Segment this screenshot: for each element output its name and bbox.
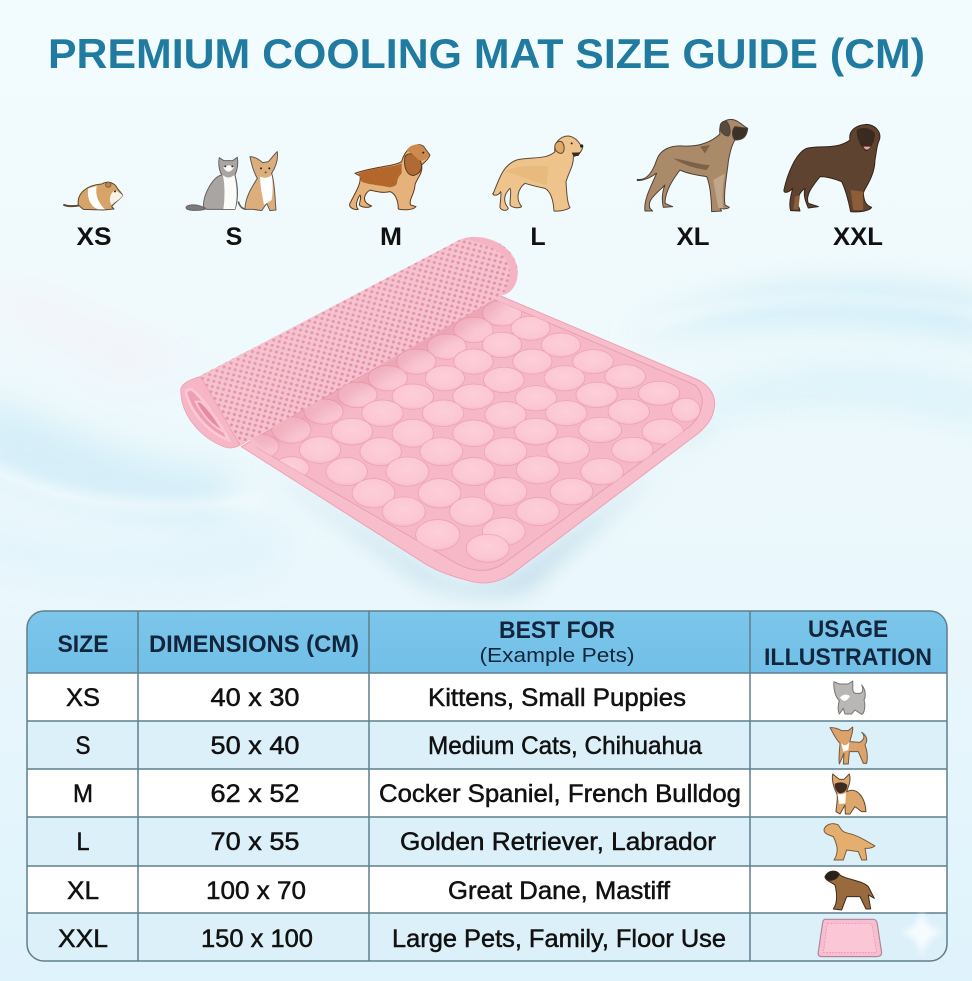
table header: (Example Pets) [480, 645, 634, 667]
table header: DIMENSIONS (CM) [149, 631, 359, 658]
size labels: M [380, 223, 402, 251]
size labels [76, 223, 883, 251]
row XL: 100 x 70 [206, 877, 306, 905]
size table [27, 611, 947, 961]
row XS [66, 684, 686, 712]
row XS: XS [66, 684, 100, 712]
icon: chihuahua small [830, 727, 867, 764]
table body and row stripes [28, 612, 946, 912]
row XXL [58, 925, 726, 953]
size labels: XL [676, 223, 710, 251]
icon: golden retriever [493, 136, 583, 211]
row S: Medium Cats, Chihuahua [428, 732, 702, 760]
icon: great dane [637, 119, 748, 212]
row M: Cocker Spaniel, French Bulldog [379, 780, 741, 808]
size labels: XS [76, 223, 112, 251]
size labels: L [530, 223, 546, 251]
row XL: XL [67, 877, 99, 905]
rolled mesh end [181, 237, 518, 448]
row XXL: Large Pets, Family, Floor Use [392, 925, 726, 953]
size labels: XXL [833, 223, 883, 251]
usage illustrations [818, 681, 882, 957]
table rows text [58, 684, 741, 953]
table header: ILLUSTRATION [764, 644, 932, 671]
icon: hamster [63, 182, 123, 210]
row L [76, 828, 716, 856]
size lineup: pets by size [63, 119, 883, 251]
row L: Golden Retriever, Labrador [400, 828, 716, 856]
row L: L [76, 828, 90, 856]
icon: golden retriever small [824, 824, 875, 860]
icon: chihuahua [238, 152, 278, 211]
row XS: Kittens, Small Puppies [428, 684, 686, 712]
flat mat with embossed circles [240, 295, 715, 583]
table header: SIZE [58, 631, 108, 658]
row XXL: 150 x 100 [201, 925, 313, 953]
row XXL: XXL [58, 925, 108, 953]
icon: grey cat [186, 157, 238, 210]
icon: mastiff small [825, 871, 874, 910]
row M [73, 780, 741, 808]
row S: 50 x 40 [210, 732, 300, 760]
row XS: 40 x 30 [210, 684, 300, 712]
sparkle watermark [900, 908, 945, 958]
cooling mat illustration [181, 237, 716, 595]
title: PREMIUM COOLING MAT SIZE GUIDE (CM) [48, 30, 925, 77]
icon: cocker spaniel [350, 144, 430, 210]
icon: french bulldog [832, 774, 866, 814]
row XL [67, 877, 670, 905]
table header: BEST FOR [499, 617, 615, 644]
row S: S [76, 732, 90, 760]
row L: 70 x 55 [210, 828, 300, 856]
icon: mastiff [784, 124, 880, 212]
row XL: Great Dane, Mastiff [448, 877, 670, 905]
row S [76, 732, 702, 760]
background water swooshes [0, 280, 972, 581]
icon: kitten [834, 681, 865, 714]
mat drop shadow [256, 417, 716, 595]
row M: 62 x 52 [210, 780, 300, 808]
table header: USAGE [808, 616, 888, 643]
icon: pink mat small [818, 919, 882, 957]
size labels: S [226, 223, 242, 251]
table header [58, 616, 932, 671]
row M: M [73, 780, 93, 808]
